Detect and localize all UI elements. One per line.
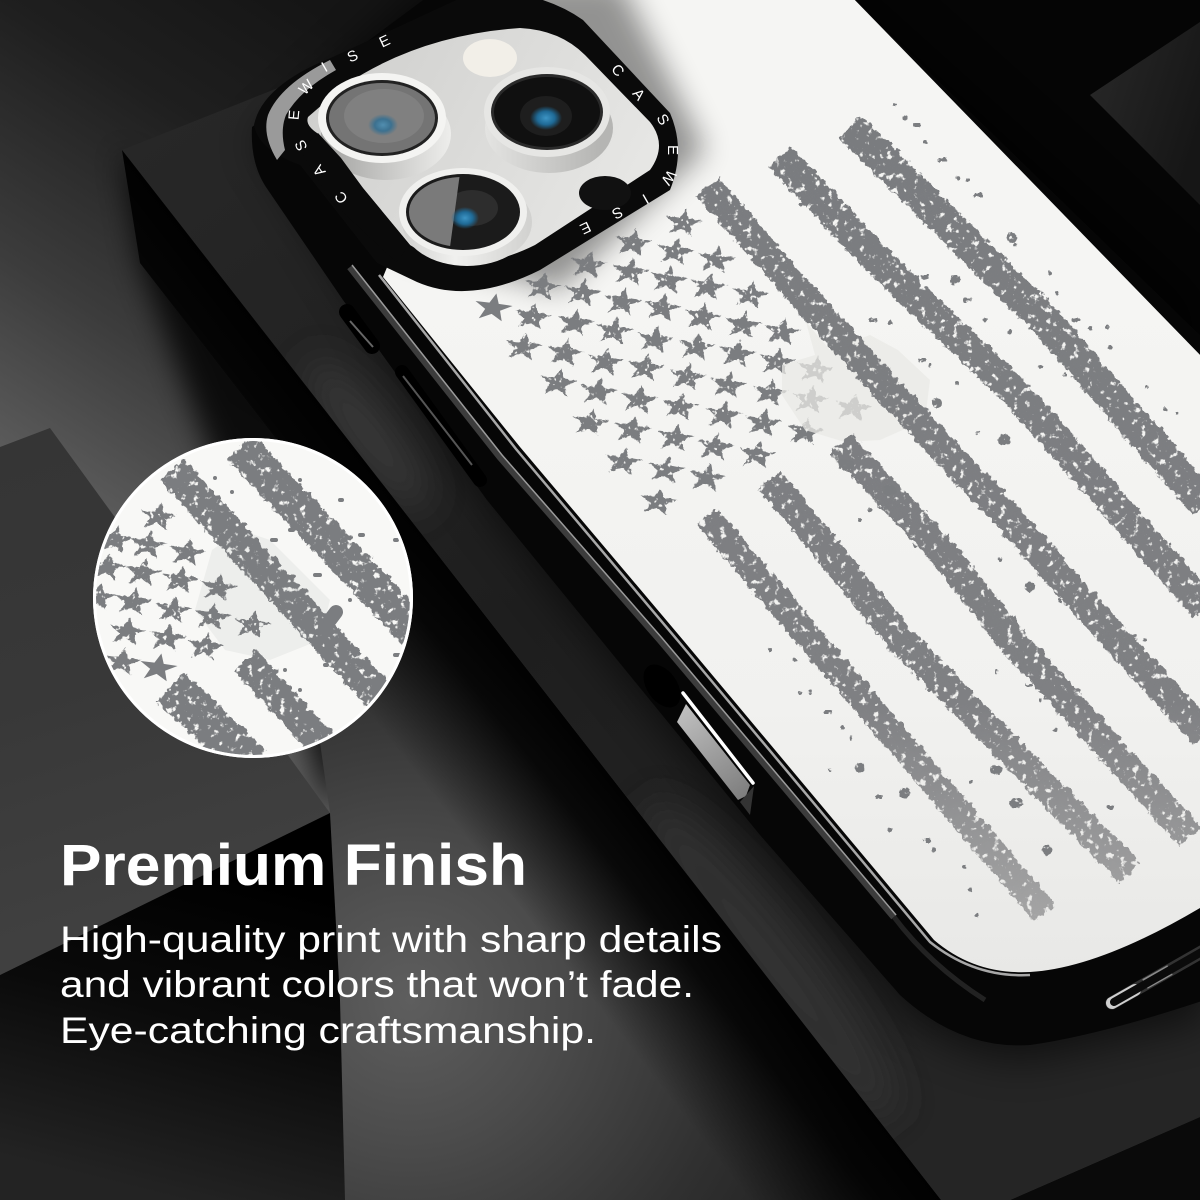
bump text band left: C	[331, 188, 352, 207]
inset print	[81, 447, 415, 765]
lens 1	[318, 73, 451, 180]
bump outer frame	[254, 0, 678, 291]
block: lower left pedestal front face	[0, 813, 345, 1200]
bump text band right: C	[607, 61, 628, 80]
bump text band right: W	[657, 167, 679, 189]
bump shadow on white panel	[484, 0, 717, 304]
microphone hole	[579, 176, 631, 210]
circular detail inset	[81, 438, 415, 765]
title: Premium Finish	[60, 833, 527, 898]
bump text band right: S	[653, 111, 672, 128]
bump text band left: W	[296, 76, 318, 99]
lens 2	[484, 67, 613, 173]
phone case body	[252, 0, 1200, 1045]
description text: Eye-catching craftsmanship.	[60, 1010, 596, 1051]
bump clear gap at left corner	[266, 60, 336, 160]
power button	[636, 658, 754, 815]
bump text band right	[577, 61, 681, 237]
description text: High-quality print with sharp details	[60, 919, 722, 960]
block: lower left pedestal top face	[0, 428, 330, 975]
flag print: ink splatter	[770, 105, 1177, 915]
bump text band right: I	[639, 190, 651, 207]
bump text band left: I	[319, 59, 331, 76]
bump text band right: E	[577, 218, 593, 237]
inset disc	[93, 438, 413, 758]
inset border	[94, 440, 412, 756]
flag print: distressed stripes	[707, 127, 1200, 913]
bump text band left: E	[377, 32, 393, 51]
bump text band left: S	[345, 47, 361, 66]
description text: and vibrant colors that won’t fade.	[60, 964, 694, 1005]
bump text band right: S	[609, 203, 625, 222]
charging port	[1112, 950, 1200, 1003]
button slot: volume	[402, 372, 480, 480]
solid star	[476, 293, 513, 321]
phone back panel: white	[383, 0, 1200, 972]
bump text band right: A	[629, 85, 648, 104]
camera bump	[254, 0, 681, 291]
bump text band right: E	[664, 145, 681, 155]
phone shadow	[255, 0, 1200, 1060]
flag print: star field	[476, 208, 873, 515]
distressed stars	[506, 208, 873, 515]
flash	[463, 39, 517, 77]
button slot: action	[347, 312, 373, 347]
block: top right pedestal	[1090, 22, 1200, 205]
ghost logo mark on print	[782, 322, 930, 442]
bump text band left: S	[292, 137, 311, 153]
bump text band left: E	[286, 109, 303, 121]
bump inner window	[307, 28, 659, 262]
description text	[60, 919, 722, 1051]
bump band over lens base	[300, 133, 410, 262]
bump text band left	[286, 32, 393, 207]
lens 3	[399, 168, 532, 266]
bump text band left: A	[310, 161, 329, 179]
